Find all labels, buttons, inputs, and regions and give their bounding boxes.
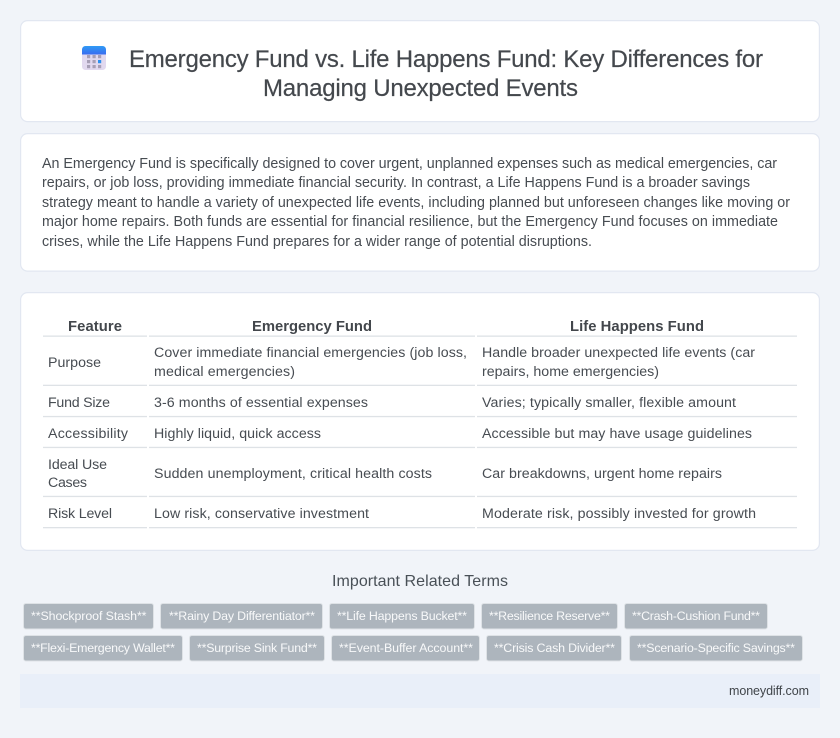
table row: ideal use cases bbox=[48, 457, 722, 491]
text block: introduction paragraph: repairs, or job loss, providing immediate financial security. In contrast, a Life Happens Fund is a broader savings bbox=[42, 175, 750, 191]
icon: calendar bbox=[82, 46, 106, 70]
tag: **Surprise Sink Fund** bbox=[197, 641, 317, 655]
tag bbox=[332, 636, 480, 661]
text block: introduction paragraph: major home repairs. Both funds are essential for financial resilience, but the Emergency Fund focuses on immediate bbox=[42, 214, 778, 230]
tag: **Resilience Reserve** bbox=[489, 609, 610, 623]
title: Managing Unexpected Events bbox=[263, 75, 578, 102]
table header row: Feature bbox=[68, 319, 122, 335]
footer: moneydiff.com bbox=[729, 684, 809, 698]
table header row: Emergency Fund bbox=[252, 319, 372, 335]
tag bbox=[630, 636, 802, 661]
table header row bbox=[68, 319, 704, 335]
tag bbox=[330, 604, 474, 629]
table row: purpose: Handle broader unexpected life events (car bbox=[482, 345, 755, 361]
panel: title header bbox=[21, 21, 819, 122]
table row: risk level bbox=[48, 506, 756, 522]
text block: introduction paragraph: crises, while the Life Happens Fund prepares for a wider range of potential disruptions. bbox=[42, 234, 592, 250]
footer bbox=[20, 674, 820, 708]
table row: accessibility: Highly liquid, quick access bbox=[154, 426, 321, 442]
table row: risk level: Risk Level bbox=[48, 506, 112, 522]
tag bbox=[24, 604, 154, 629]
tag bbox=[624, 604, 768, 629]
title: Emergency Fund vs. Life Happens Fund: Key Differences for bbox=[129, 46, 763, 73]
tag: **Rainy Day Differentiator** bbox=[169, 609, 315, 623]
tag: **Crash-Cushion Fund** bbox=[632, 609, 760, 623]
tag: **Crisis Cash Divider** bbox=[494, 641, 615, 655]
table row: accessibility: Accessible but may have usage guidelines bbox=[482, 426, 752, 442]
table row: risk level: Low risk, conservative investment bbox=[154, 506, 369, 522]
text block: introduction paragraph bbox=[42, 156, 790, 250]
tag bbox=[160, 604, 322, 629]
table row: purpose: medical emergencies) bbox=[154, 364, 295, 380]
table row: fund size: 3-6 months of essential expenses bbox=[154, 395, 368, 411]
heading: important related terms: Important Related Terms bbox=[332, 573, 508, 590]
tag: **Shockproof Stash** bbox=[31, 609, 147, 623]
table row: accessibility bbox=[48, 426, 752, 442]
text block: introduction paragraph: An Emergency Fund is specifically designed to cover urgent, unplanned expenses such as medical emergencies, car bbox=[42, 156, 777, 172]
tag bbox=[190, 636, 324, 661]
table row: purpose: repairs, home emergencies) bbox=[482, 364, 659, 380]
table row: purpose: Cover immediate financial emergencies (job loss, bbox=[154, 345, 467, 361]
tag: **Flexi-Emergency Wallet** bbox=[31, 641, 175, 655]
panel: introduction bbox=[21, 134, 819, 271]
table header row: Life Happens Fund bbox=[570, 319, 704, 335]
table row: purpose: Purpose bbox=[48, 355, 101, 371]
title bbox=[129, 46, 763, 102]
panel: related term tags bbox=[24, 604, 802, 661]
table row: ideal use cases: Cases bbox=[48, 475, 87, 491]
table row: fund size: Fund Size bbox=[48, 395, 110, 411]
text block: introduction paragraph: strategy meant to handle a variety of unexpected life events, including planned but unforeseen changes like moving or bbox=[42, 195, 790, 211]
table row: accessibility: Accessibility bbox=[48, 426, 129, 442]
tag: **Scenario-Specific Savings** bbox=[637, 641, 795, 655]
table row: fund size: Varies; typically smaller, flexible amount bbox=[482, 395, 736, 411]
table row: ideal use cases: Sudden unemployment, critical health costs bbox=[154, 466, 432, 482]
table row: ideal use cases: Ideal Use bbox=[48, 457, 107, 473]
tag bbox=[482, 604, 618, 629]
table row: fund size bbox=[48, 395, 736, 411]
table row: ideal use cases: Car breakdowns, urgent home repairs bbox=[482, 466, 722, 482]
panel: comparison table bbox=[21, 293, 819, 550]
tag: **Life Happens Bucket** bbox=[337, 609, 467, 623]
tag: **Event-Buffer Account** bbox=[339, 641, 473, 655]
table row: risk level: Moderate risk, possibly invested for growth bbox=[482, 506, 756, 522]
tag bbox=[486, 636, 622, 661]
tag bbox=[24, 636, 182, 661]
table row: purpose bbox=[48, 345, 755, 380]
